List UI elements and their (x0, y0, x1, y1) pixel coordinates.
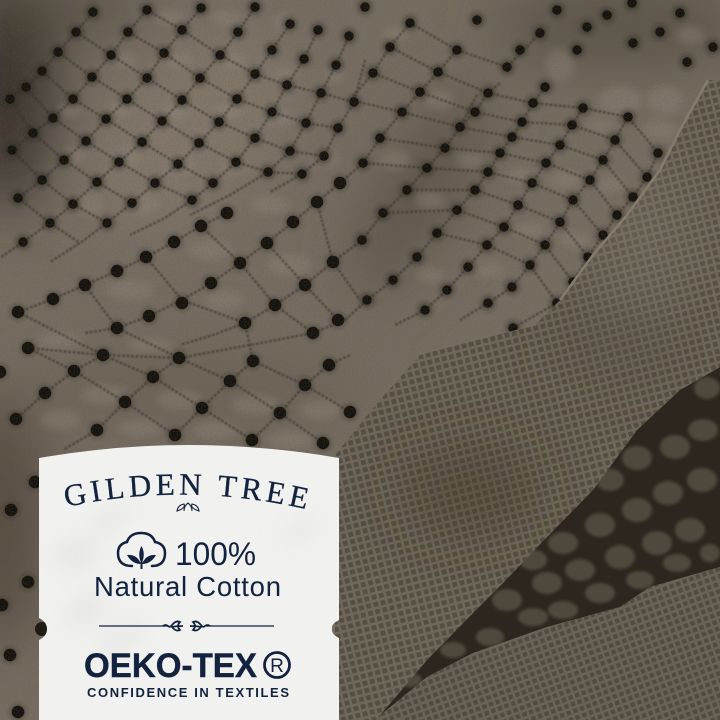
fabric: bottom right folded waffle-weave border (376, 567, 720, 720)
text: OEKO-TEX: OEKO-TEX (84, 647, 257, 685)
text: Natural Cotton: Natural Cotton (94, 571, 281, 602)
waffle holes: large lower field (0, 183, 350, 712)
stitched seam along the border edge (560, 80, 708, 300)
label tag (39, 445, 339, 720)
waffle lump highlights (38, 10, 704, 449)
brand name: GILDEN TREE: GILDEN TREE (64, 474, 308, 509)
brand ornament (177, 503, 199, 511)
icon: registered mark: R (270, 656, 284, 677)
text: CONFIDENCE IN TEXTILES: CONFIDENCE IN TEXTILES (87, 685, 289, 700)
fabric: dark waffle band under the folded border (370, 360, 720, 720)
fabric: main diagonal waffle-weave border (330, 70, 720, 720)
icon: registered mark (264, 652, 290, 678)
label fabric mottling (53, 499, 323, 665)
icon: cotton boll (118, 533, 165, 569)
care label (39, 445, 339, 720)
waffle seams following the hole rows (0, 7, 658, 450)
waffle holes: small upper field (10, 3, 713, 328)
text: 100%: 100% (175, 536, 256, 572)
divider with ornament (99, 621, 274, 631)
label notch shadow (35, 622, 49, 636)
